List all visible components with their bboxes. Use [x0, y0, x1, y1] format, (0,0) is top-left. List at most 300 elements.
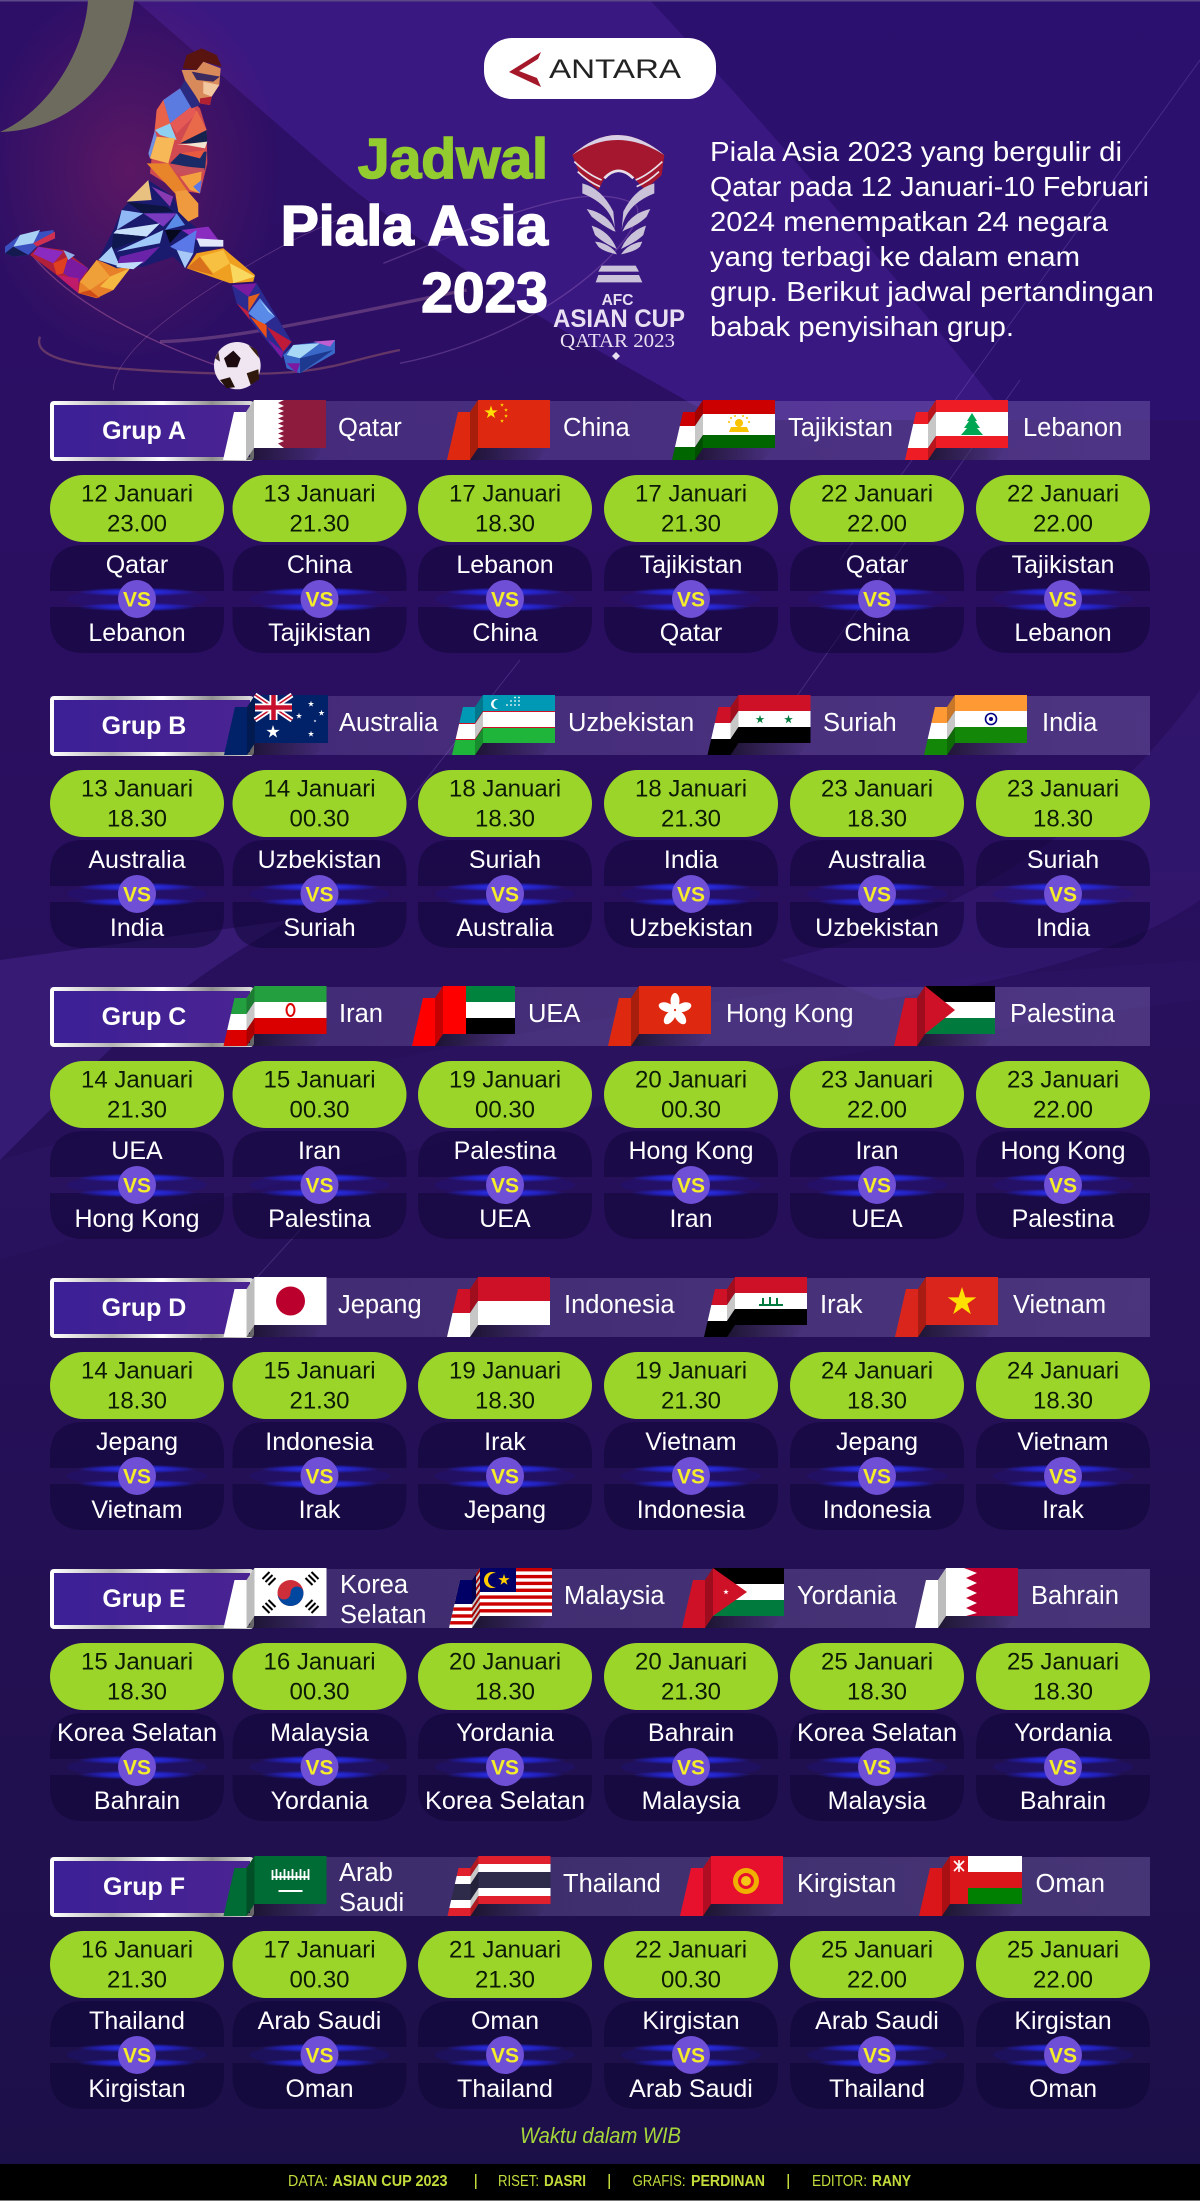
match: Tajikistan vs Qatar: 21.30 — [661, 511, 721, 538]
arm — [147, 130, 198, 222]
panel: Grup B — [50, 695, 1150, 948]
match: Malaysia vs Yordania: Yordania — [271, 1787, 368, 1815]
match: Irak vs Jepang: 19 Januari — [449, 1358, 561, 1385]
match: Vietnam vs Indonesia: VS — [677, 1466, 705, 1488]
match: India vs Uzbekistan: India — [664, 846, 718, 874]
intro text: 2024 menempatkan 24 negara — [710, 206, 1109, 237]
match: Uzbekistan vs Suriah: Uzbekistan — [258, 846, 381, 874]
flag: Hong Kong — [608, 986, 711, 1046]
match: Hong Kong vs Iran: 00.30 — [661, 1097, 721, 1124]
match: Hong Kong vs Palestina: 22.00 — [1033, 1097, 1093, 1124]
match: Irak vs Jepang: 18.30 — [475, 1388, 535, 1415]
label: Arab — [339, 1859, 393, 1887]
intro text: Piala Asia 2023 yang bergulir di — [710, 136, 1122, 167]
match: China vs Tajikistan: Tajikistan — [268, 619, 371, 647]
match: Kirgistan vs Arab Saudi: Arab Saudi — [629, 2075, 753, 2103]
match: Suriah vs India: 23 Januari — [1007, 776, 1119, 803]
match: Oman vs Thailand: 21.30 — [475, 1967, 535, 1994]
match: Kirgistan vs Arab Saudi: 22 Januari — [635, 1937, 747, 1964]
match: Irak vs Jepang: Jepang — [464, 1496, 546, 1524]
match: Iran vs UEA: VS — [863, 1174, 891, 1198]
match: Indonesia vs Irak: Irak — [299, 1496, 341, 1524]
match: Palestina vs UEA: Palestina — [454, 1137, 557, 1165]
match: Bahrain vs Malaysia: Bahrain — [648, 1719, 734, 1747]
match: Suriah vs India: VS — [1049, 884, 1077, 906]
label: Suriah — [823, 709, 897, 737]
match: Tajikistan vs Qatar: Tajikistan — [640, 551, 742, 579]
panel: Grup C — [50, 986, 1150, 1239]
match: Arab Saudi vs Thailand: VS — [863, 2044, 891, 2068]
group banner — [50, 1856, 1150, 1917]
match: Yordania vs Bahrain: 25 Januari — [1007, 1649, 1119, 1676]
match: Arab Saudi vs Oman: 17 Januari — [263, 1937, 376, 1964]
match: Qatar vs China: VS — [863, 588, 891, 612]
match: Australia vs Uzbekistan — [790, 770, 964, 948]
panel: Grup A — [50, 400, 1150, 653]
AFC Asian Cup trophy and logo — [553, 135, 685, 360]
match: Hong Kong vs Iran: Iran — [669, 1205, 713, 1233]
label: UEA — [528, 1000, 580, 1028]
match: Qatar vs China — [790, 475, 964, 653]
match: Iran vs Palestina: Palestina — [268, 1205, 371, 1233]
player illustration — [5, 48, 335, 389]
flag: UEA — [412, 986, 515, 1046]
group banner — [50, 986, 1150, 1046]
title: Piala Asia — [281, 194, 549, 258]
match: Vietnam vs Irak: VS — [1049, 1466, 1077, 1488]
match: Arab Saudi vs Thailand: Arab Saudi — [815, 2007, 939, 2035]
label: Qatar — [338, 414, 402, 442]
match: Korea Selatan vs Malaysia: Korea Selatan — [797, 1719, 957, 1747]
match: UEA vs Hong Kong: VS — [123, 1174, 151, 1198]
title: 2023 — [421, 261, 548, 325]
match: Hong Kong vs Palestina — [976, 1061, 1150, 1239]
match: Arab Saudi vs Thailand: 25 Januari — [821, 1937, 933, 1964]
match: Malaysia vs Yordania — [232, 1643, 406, 1821]
match: Qatar vs China: 22 Januari — [821, 481, 933, 508]
flag: Thailand — [448, 1856, 550, 1916]
match: UEA vs Hong Kong: Hong Kong — [74, 1205, 200, 1233]
match: Qatar vs China: 22.00 — [847, 511, 907, 538]
match: Vietnam vs Irak: Irak — [1042, 1496, 1084, 1524]
football — [214, 342, 261, 389]
match: Yordania vs Bahrain: 18.30 — [1033, 1679, 1093, 1706]
title — [281, 127, 549, 325]
match: Hong Kong vs Iran: VS — [677, 1174, 705, 1198]
match: Kirgistan vs Oman: Kirgistan — [1014, 2007, 1112, 2035]
label: Kirgistan — [797, 1870, 896, 1898]
match: Bahrain vs Malaysia: 21.30 — [661, 1679, 721, 1706]
label: China — [563, 414, 630, 442]
match: UEA vs Hong Kong: UEA — [111, 1137, 163, 1165]
match: Vietnam vs Irak: Vietnam — [1017, 1428, 1109, 1456]
match: Arab Saudi vs Thailand: 22.00 — [847, 1967, 907, 1994]
match: Lebanon vs China: Lebanon — [456, 551, 554, 579]
label: Uzbekistan — [568, 709, 694, 737]
match: Arab Saudi vs Oman — [232, 1931, 406, 2109]
match: Bahrain vs Malaysia — [604, 1643, 778, 1821]
match: Suriah vs India: Suriah — [1027, 846, 1099, 874]
match: Iran vs UEA: Iran — [855, 1137, 899, 1165]
label: Palestina — [1010, 1000, 1116, 1028]
match: China vs Tajikistan: 13 Januari — [263, 481, 376, 508]
match: Australia vs Uzbekistan: Australia — [828, 846, 926, 874]
match: Australia vs India: 13 Januari — [81, 776, 193, 803]
match: Arab Saudi vs Thailand — [790, 1931, 964, 2109]
match: Australia vs India: India — [110, 914, 164, 942]
match: Jepang vs Vietnam: 18.30 — [107, 1388, 167, 1415]
match: Thailand vs Kirgistan: Kirgistan — [88, 2075, 186, 2103]
match: Korea Selatan vs Bahrain: 18.30 — [107, 1679, 167, 1706]
label: Oman — [1036, 1870, 1105, 1898]
match: Vietnam vs Indonesia: 19 Januari — [635, 1358, 747, 1385]
group banner: Grup B — [102, 712, 186, 740]
match: Suriah vs India: India — [1036, 914, 1090, 942]
hips and thighs — [98, 180, 223, 269]
flag: Uzbekistan — [452, 695, 555, 755]
title: Jadwal — [358, 127, 548, 191]
text: Asian Cup: ASIAN CUP — [553, 305, 685, 333]
match: Vietnam vs Irak — [976, 1352, 1150, 1530]
match: Iran vs Palestina: 15 Januari — [263, 1067, 376, 1094]
match: Vietnam vs Indonesia: 21.30 — [661, 1388, 721, 1415]
match: India vs Uzbekistan — [604, 770, 778, 948]
match: Suriah vs Australia — [418, 770, 592, 948]
match: Arab Saudi vs Oman: VS — [305, 2044, 334, 2068]
match: Jepang vs Vietnam: VS — [123, 1466, 151, 1488]
footer credits: PERDINAN — [691, 2173, 765, 2190]
intro text: babak penyisihan grup. — [710, 311, 1014, 342]
flag: Yordania — [682, 1568, 784, 1628]
match: Korea Selatan vs Bahrain: Korea Selatan — [57, 1719, 217, 1747]
match: Australia vs India: Australia — [88, 846, 186, 874]
label: Irak — [820, 1291, 863, 1319]
front shin and foot — [232, 283, 335, 373]
match: Irak vs Jepang: VS — [491, 1466, 519, 1488]
flag: Oman — [919, 1856, 1022, 1916]
match: Yordania vs Korea Selatan — [418, 1643, 592, 1821]
label: Jepang — [338, 1291, 422, 1319]
flag: Bahrain — [915, 1568, 1018, 1628]
intro text — [710, 136, 1154, 342]
match: Oman vs Thailand: Thailand — [457, 2075, 553, 2103]
match: Korea Selatan vs Bahrain — [50, 1643, 224, 1821]
match: Uzbekistan vs Suriah: 14 Januari — [263, 776, 376, 803]
match: Arab Saudi vs Thailand: Thailand — [829, 2075, 925, 2103]
match: Tajikistan vs Qatar: VS — [677, 588, 705, 612]
label: Bahrain — [1031, 1582, 1119, 1610]
match: India vs Uzbekistan: 18 Januari — [635, 776, 747, 803]
match: Bahrain vs Malaysia: VS — [677, 1756, 705, 1780]
match: Kirgistan vs Arab Saudi: Kirgistan — [642, 2007, 740, 2035]
match: Kirgistan vs Arab Saudi — [604, 1931, 778, 2109]
match: Qatar vs Lebanon — [50, 475, 224, 653]
match: Indonesia vs Irak: 15 Januari — [263, 1358, 376, 1385]
label: Selatan — [340, 1601, 426, 1629]
match: Uzbekistan vs Suriah: Suriah — [283, 914, 356, 942]
label: Korea — [340, 1571, 409, 1599]
footer credits: RISET: — [498, 2173, 539, 2190]
match: Arab Saudi vs Oman: Oman — [285, 2075, 354, 2103]
match: Yordania vs Korea Selatan: 20 Januari — [449, 1649, 561, 1676]
match: Tajikistan vs Lebanon: Lebanon — [1014, 619, 1112, 647]
match: India vs Uzbekistan: Uzbekistan — [629, 914, 753, 942]
match: Vietnam vs Indonesia — [604, 1352, 778, 1530]
match: Yordania vs Korea Selatan: 18.30 — [475, 1679, 535, 1706]
match: Jepang vs Vietnam — [50, 1352, 224, 1530]
match: Suriah vs Australia: VS — [491, 884, 519, 906]
flag: Kirgistan — [680, 1856, 783, 1916]
match: Kirgistan vs Oman: VS — [1049, 2044, 1077, 2068]
match: Vietnam vs Indonesia: Vietnam — [645, 1428, 737, 1456]
match: Tajikistan vs Lebanon: 22.00 — [1033, 511, 1093, 538]
group banner: Grup D — [102, 1294, 186, 1322]
intro text: Qatar pada 12 Januari-10 Februari — [710, 171, 1149, 202]
trophy — [572, 135, 664, 282]
match: Yordania vs Bahrain: Bahrain — [1020, 1787, 1106, 1815]
footer credits: GRAFIS: — [632, 2173, 686, 2190]
match: Suriah vs Australia: 18 Januari — [449, 776, 561, 803]
match: Korea Selatan vs Malaysia: 25 Januari — [821, 1649, 933, 1676]
match: Jepang vs Indonesia: 24 Januari — [821, 1358, 933, 1385]
match: UEA vs Hong Kong — [50, 1061, 224, 1239]
logo: ANTARA: ANTARA — [549, 54, 681, 84]
match: Korea Selatan vs Bahrain: 15 Januari — [81, 1649, 193, 1676]
match: Yordania vs Bahrain — [976, 1643, 1150, 1821]
flag: Indonesia — [447, 1277, 550, 1337]
match: Tajikistan vs Qatar — [604, 475, 778, 653]
match: Yordania vs Korea Selatan: Yordania — [456, 1719, 554, 1747]
label: Australia — [339, 709, 439, 737]
rear leg — [5, 230, 130, 298]
match: Lebanon vs China: 18.30 — [475, 511, 535, 538]
match: Jepang vs Vietnam: Vietnam — [91, 1496, 183, 1524]
match: Korea Selatan vs Bahrain: VS — [123, 1756, 151, 1780]
flag: Tajikistan — [672, 400, 775, 460]
match: Palestina vs UEA: 19 Januari — [449, 1067, 561, 1094]
panel: Grup F — [50, 1856, 1150, 2109]
match: Oman vs Thailand: Oman — [471, 2007, 539, 2035]
group banner — [50, 695, 1150, 755]
match: India vs Uzbekistan: 21.30 — [661, 806, 721, 833]
match: Korea Selatan vs Malaysia — [790, 1643, 964, 1821]
label: Hong Kong — [726, 1000, 854, 1028]
match: Kirgistan vs Oman — [976, 1931, 1150, 2109]
flag: Arab Saudi — [224, 1856, 326, 1916]
flag: Malaysia — [449, 1568, 552, 1628]
match: Kirgistan vs Arab Saudi: VS — [677, 2044, 705, 2068]
match: Suriah vs India: 18.30 — [1033, 806, 1093, 833]
match: Jepang vs Indonesia: Jepang — [836, 1428, 918, 1456]
match: Hong Kong vs Palestina: 23 Januari — [1007, 1067, 1119, 1094]
logo: ANTARA — [484, 38, 716, 99]
group banner: Grup F — [103, 1873, 185, 1901]
match: Jepang vs Indonesia — [790, 1352, 964, 1530]
match: Lebanon vs China: VS — [491, 588, 519, 612]
note: Waktu dalam WIB: Waktu dalam WIB — [520, 2123, 681, 2148]
match: China vs Tajikistan: China — [287, 551, 352, 579]
match: Lebanon vs China: 17 Januari — [449, 481, 561, 508]
match: Tajikistan vs Qatar: Qatar — [660, 619, 722, 647]
match: UEA vs Hong Kong: 14 Januari — [81, 1067, 193, 1094]
label: India — [1042, 709, 1098, 737]
match: Korea Selatan vs Malaysia: 18.30 — [847, 1679, 907, 1706]
match: China vs Tajikistan — [232, 475, 406, 653]
match: Thailand vs Kirgistan: VS — [123, 2044, 151, 2068]
match: Thailand vs Kirgistan: 21.30 — [107, 1967, 167, 1994]
group banner: Grup E — [102, 1585, 186, 1613]
match: Yordania vs Korea Selatan: Korea Selatan — [425, 1787, 585, 1815]
match: Malaysia vs Yordania: Malaysia — [270, 1719, 369, 1747]
flag: Jepang — [224, 1277, 326, 1337]
footer credits: DASRI — [544, 2173, 586, 2190]
match: Oman vs Thailand — [418, 1931, 592, 2109]
match: Tajikistan vs Lebanon: VS — [1049, 588, 1077, 612]
match: Jepang vs Vietnam: Jepang — [96, 1428, 178, 1456]
label: Vietnam — [1013, 1291, 1106, 1319]
match: Palestina vs UEA: VS — [491, 1174, 519, 1198]
panel: Grup D — [50, 1277, 1150, 1530]
match: Kirgistan vs Oman: 25 Januari — [1007, 1937, 1119, 1964]
flag: China — [447, 400, 550, 460]
intro text: grup. Berikut jadwal pertandingan — [710, 276, 1154, 307]
text: Qatar 2023: QATAR 2023 — [560, 330, 675, 352]
match: Qatar vs Lebanon: Qatar — [106, 551, 168, 579]
match: Suriah vs Australia: Australia — [456, 914, 554, 942]
match: Yordania vs Bahrain: VS — [1049, 1756, 1077, 1780]
match: Korea Selatan vs Malaysia: Malaysia — [828, 1787, 926, 1815]
match: Qatar vs China: China — [844, 619, 910, 647]
group banner — [50, 400, 1150, 460]
match: India vs Uzbekistan: VS — [677, 884, 705, 906]
match: Uzbekistan vs Suriah — [232, 770, 406, 948]
match: Bahrain vs Malaysia: Malaysia — [642, 1787, 740, 1815]
label: Malaysia — [564, 1582, 665, 1610]
match: Kirgistan vs Arab Saudi: 00.30 — [661, 1967, 721, 1994]
match: Iran vs Palestina: Iran — [298, 1137, 341, 1165]
match: Hong Kong vs Iran — [604, 1061, 778, 1239]
label: Thailand — [563, 1870, 661, 1898]
match: Thailand vs Kirgistan — [50, 1931, 224, 2109]
match: Yordania vs Bahrain: Yordania — [1014, 1719, 1112, 1747]
flag: Iran — [224, 986, 326, 1046]
match: Iran vs UEA: UEA — [851, 1205, 903, 1233]
match: Irak vs Jepang — [418, 1352, 592, 1530]
match: Vietnam vs Irak: 18.30 — [1033, 1388, 1093, 1415]
group banner — [50, 1568, 1150, 1629]
match: Australia vs India — [50, 770, 224, 948]
match: Bahrain vs Malaysia: 20 Januari — [635, 1649, 747, 1676]
match: Hong Kong vs Palestina: VS — [1049, 1174, 1077, 1198]
match: Lebanon vs China: China — [472, 619, 538, 647]
flag: Qatar — [223, 400, 326, 460]
match: Qatar vs Lebanon: Lebanon — [88, 619, 186, 647]
match: Uzbekistan vs Suriah: 00.30 — [289, 806, 350, 833]
match: Indonesia vs Irak: Indonesia — [265, 1428, 374, 1456]
match: Palestina vs UEA — [418, 1061, 592, 1239]
swirl lines behind player — [33, 196, 638, 390]
match: Indonesia vs Irak: 21.30 — [289, 1388, 350, 1415]
group banner — [50, 1277, 1150, 1337]
match: Thailand vs Kirgistan: Thailand — [89, 2007, 185, 2035]
match: Iran vs UEA: 22.00 — [847, 1097, 907, 1124]
match: Tajikistan vs Lebanon: Tajikistan — [1012, 551, 1114, 579]
footer credits — [0, 2164, 1200, 2201]
match: Vietnam vs Indonesia: Indonesia — [637, 1496, 745, 1524]
front thigh — [187, 248, 255, 283]
match: Palestina vs UEA: UEA — [479, 1205, 531, 1233]
match: Iran vs Palestina: VS — [305, 1174, 334, 1198]
match: Hong Kong vs Iran: Hong Kong — [628, 1137, 754, 1165]
match: Malaysia vs Yordania: VS — [305, 1756, 334, 1780]
match: Malaysia vs Yordania: 00.30 — [289, 1679, 350, 1706]
match: Australia vs India: 18.30 — [107, 806, 167, 833]
label: Saudi — [339, 1889, 404, 1917]
label: Iran — [339, 1000, 383, 1028]
match: Malaysia vs Yordania: 16 Januari — [263, 1649, 376, 1676]
flag: Suriah — [708, 695, 810, 755]
match: Tajikistan vs Lebanon: 22 Januari — [1007, 481, 1119, 508]
label: Lebanon — [1023, 414, 1122, 442]
label: Tajikistan — [788, 414, 893, 442]
match: Suriah vs India — [976, 770, 1150, 948]
match: China vs Tajikistan: 21.30 — [289, 511, 350, 538]
match: Arab Saudi vs Oman: Arab Saudi — [258, 2007, 381, 2035]
match: Yordania vs Korea Selatan: VS — [491, 1756, 519, 1780]
match: Irak vs Jepang: Irak — [484, 1428, 526, 1456]
match: Thailand vs Kirgistan: 16 Januari — [81, 1937, 193, 1964]
label: Indonesia — [564, 1291, 675, 1319]
flag: Korea Selatan — [224, 1568, 326, 1628]
flag: Lebanon — [905, 400, 1008, 460]
label: Yordania — [797, 1582, 898, 1610]
match: Jepang vs Indonesia: VS — [863, 1466, 891, 1488]
match: Vietnam vs Irak: 24 Januari — [1007, 1358, 1119, 1385]
match: Iran vs Palestina: 00.30 — [289, 1097, 350, 1124]
match: Australia vs Uzbekistan: Uzbekistan — [815, 914, 939, 942]
footer credits: RANY — [872, 2173, 912, 2190]
match: Arab Saudi vs Oman: 00.30 — [289, 1967, 350, 1994]
match: Suriah vs Australia: 18.30 — [475, 806, 535, 833]
match: Kirgistan vs Oman: 22.00 — [1033, 1967, 1093, 1994]
match: Indonesia vs Irak — [232, 1352, 406, 1530]
intro text: yang terbagi ke dalam enam — [710, 241, 1080, 272]
decorative grey arc — [0, 0, 134, 132]
match: Iran vs Palestina — [232, 1061, 406, 1239]
match: Tajikistan vs Lebanon — [976, 475, 1150, 653]
flag: India — [924, 695, 1027, 755]
match: Palestina vs UEA: 00.30 — [475, 1097, 535, 1124]
match: Jepang vs Vietnam: 14 Januari — [81, 1358, 193, 1385]
match: Lebanon vs China — [418, 475, 592, 653]
match: Hong Kong vs Palestina: Hong Kong — [1000, 1137, 1126, 1165]
footer credits: ASIAN CUP 2023 — [332, 2173, 448, 2190]
footer credits: DATA: — [288, 2173, 328, 2190]
match: UEA vs Hong Kong: 21.30 — [107, 1097, 167, 1124]
flag: Australia — [224, 695, 328, 755]
match: China vs Tajikistan: VS — [305, 588, 334, 612]
match: Oman vs Thailand: VS — [491, 2044, 519, 2068]
match: Jepang vs Indonesia: Indonesia — [823, 1496, 931, 1524]
match: Australia vs Uzbekistan: VS — [863, 884, 891, 906]
text: AFC: AFC — [602, 292, 633, 309]
match: Qatar vs China: Qatar — [846, 551, 908, 579]
match: Australia vs Uzbekistan: 23 Januari — [821, 776, 933, 803]
match: Suriah vs Australia: Suriah — [469, 846, 541, 874]
match: Oman vs Thailand: 21 Januari — [449, 1937, 561, 1964]
flag: Irak — [704, 1277, 807, 1337]
footer credits: EDITOR: — [812, 2173, 867, 2190]
